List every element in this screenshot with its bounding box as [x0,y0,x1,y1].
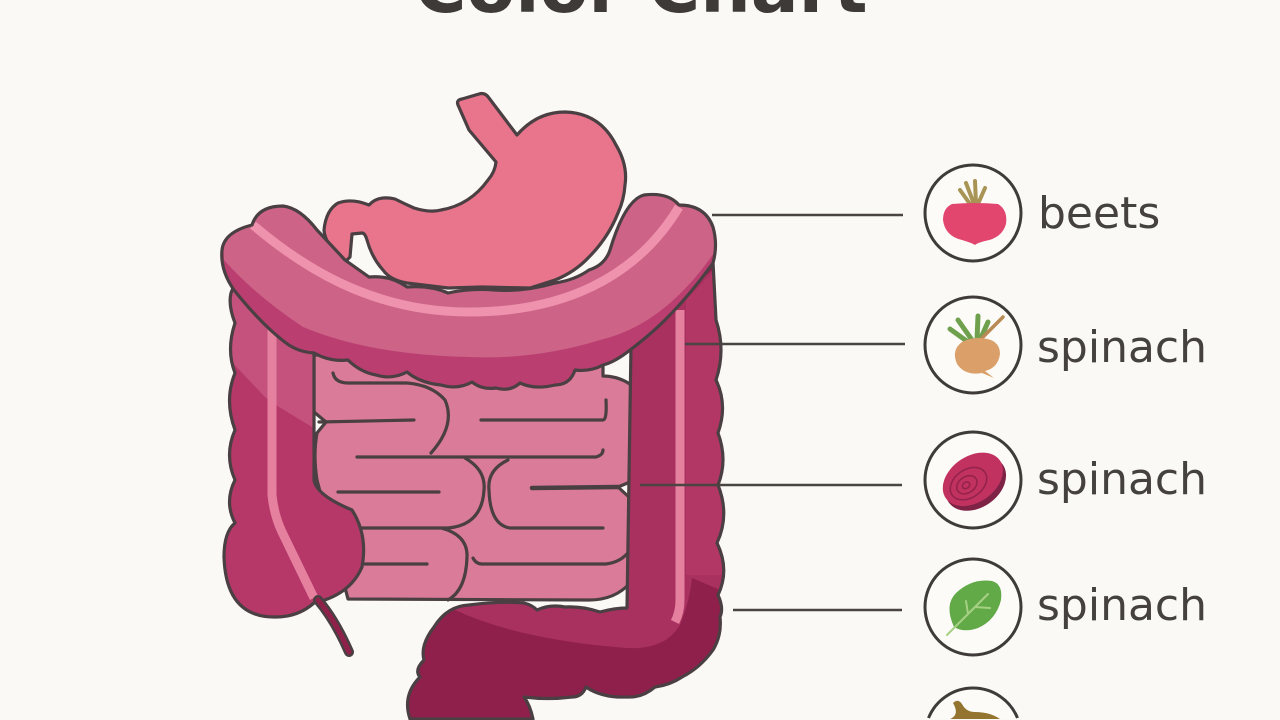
icon: turnip root [955,338,1000,378]
digestive system illustration [220,94,725,719]
item: spinach 1 [925,297,1207,393]
icon ring: turnip [925,297,1021,393]
item: beets [925,165,1160,261]
icon: brown food [950,701,1000,719]
item: spinach 2 [925,432,1207,528]
icon: beet root [943,203,1006,245]
leader lines [640,215,905,610]
appendix [318,600,349,652]
icon ring outline [928,688,1018,718]
icon: leaf vein [947,594,990,635]
icon: turnip leaves [950,316,988,342]
appendix fill [318,600,349,652]
label: beets: beets [1038,188,1160,239]
stomach [324,94,626,288]
small intestine [314,355,634,600]
ascending colon and cecum [220,285,370,620]
icon: spinach leaf [949,580,1001,630]
icon ring: beets [925,165,1021,261]
icon ring: spinach leaf [925,559,1021,655]
icon: turnip stem [982,317,1003,338]
item: spinach 3 [925,559,1207,655]
icon ring: beet slice [925,432,1021,528]
label: spinach: spinach [1037,322,1207,373]
icon: beet slice [933,442,1017,522]
icon: beet leaves [960,181,985,204]
transverse colon [222,190,720,389]
icon ring [928,689,1018,719]
infographic canvas [220,0,1204,720]
label: spinach: spinach [1037,454,1207,505]
item: partially visible fifth icon [928,688,1018,719]
descending and sigmoid colon [408,260,725,719]
label: spinach: spinach [1037,580,1207,631]
